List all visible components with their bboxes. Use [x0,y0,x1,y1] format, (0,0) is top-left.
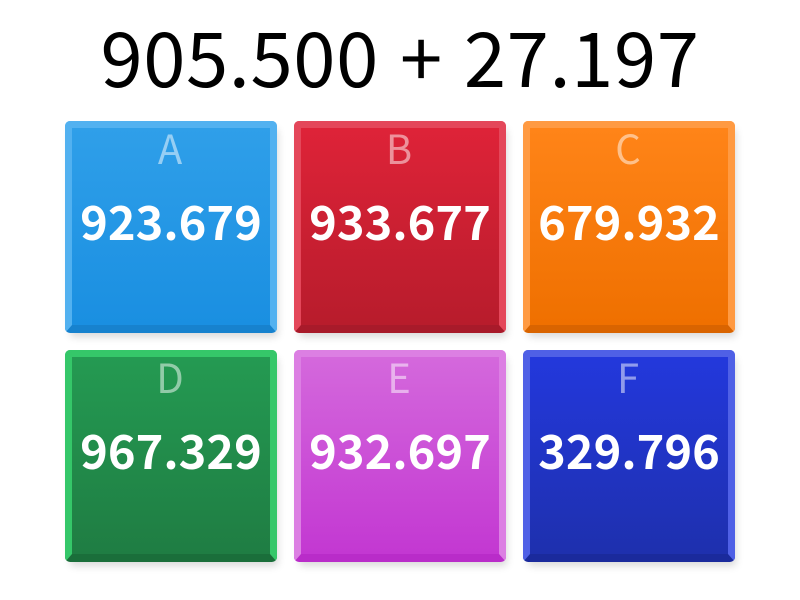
panel: answer B [294,121,506,333]
value: A: 923.679 [80,185,262,254]
value: B: 933.677 [309,185,491,254]
value: F: 329.796 [538,414,720,483]
panel: answer F [523,350,735,562]
value: C: 679.932 [538,185,720,254]
title: 905.500 + 27.197 [100,0,700,109]
panel: answer D [65,350,277,562]
panel: answer C [523,121,735,333]
value: E: 932.697 [309,414,491,483]
value: D: 967.329 [80,414,262,483]
panel: answer A [65,121,277,333]
panel: answer E [294,350,506,562]
